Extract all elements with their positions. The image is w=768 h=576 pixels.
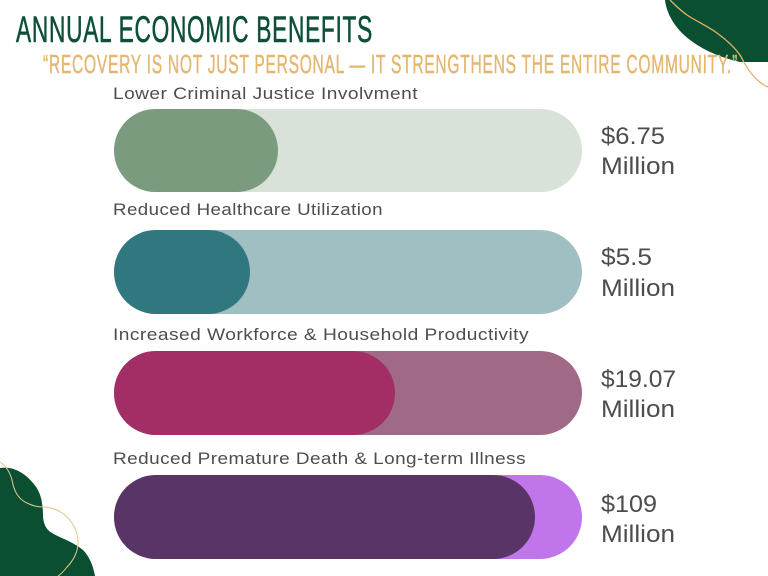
panel: workforce benefit	[113, 325, 676, 435]
value: $5.5 Million	[601, 244, 675, 302]
value: $109 Million: $109	[601, 491, 657, 518]
bar fill: workforce	[114, 351, 395, 435]
value: $6.75 Million: Million	[601, 153, 675, 180]
value: $5.5 Million: Million	[601, 275, 675, 302]
label: healthcare: Reduced Healthcare Utilization	[113, 200, 383, 219]
bar fill: criminal justice	[114, 109, 278, 192]
decorative blob: bottom left	[0, 462, 95, 576]
value: $19.07 Million: $19.07	[601, 366, 676, 393]
value: $19.07 Million	[601, 366, 676, 423]
bar track: premature death	[114, 475, 582, 559]
label: premature death: Reduced Premature Death & Long-term Illness	[113, 449, 526, 468]
value: $6.75 Million	[601, 123, 675, 180]
bar track: healthcare	[114, 230, 582, 314]
value: $19.07 Million: Million	[601, 396, 675, 423]
decorative blob: top right	[665, 0, 768, 87]
label: criminal justice: Lower Criminal Justice Involvment	[113, 84, 418, 103]
bar fill: healthcare	[114, 230, 250, 314]
label: workforce: Increased Workforce & Household Productivity	[113, 325, 529, 344]
panel: healthcare benefit	[113, 200, 675, 314]
value: $5.5 Million: $5.5	[601, 244, 652, 271]
bar track: criminal justice	[114, 109, 582, 192]
title: ANNUAL ECONOMIC BENEFITS	[16, 9, 373, 50]
bar track: workforce	[114, 351, 582, 435]
value: $6.75 Million: $6.75	[601, 123, 665, 150]
panel: premature death benefit	[113, 449, 675, 559]
bar fill: premature death	[114, 475, 535, 559]
panel: criminal justice benefit	[113, 84, 675, 192]
value: $109 Million	[601, 491, 675, 548]
value: $109 Million: Million	[601, 521, 675, 548]
